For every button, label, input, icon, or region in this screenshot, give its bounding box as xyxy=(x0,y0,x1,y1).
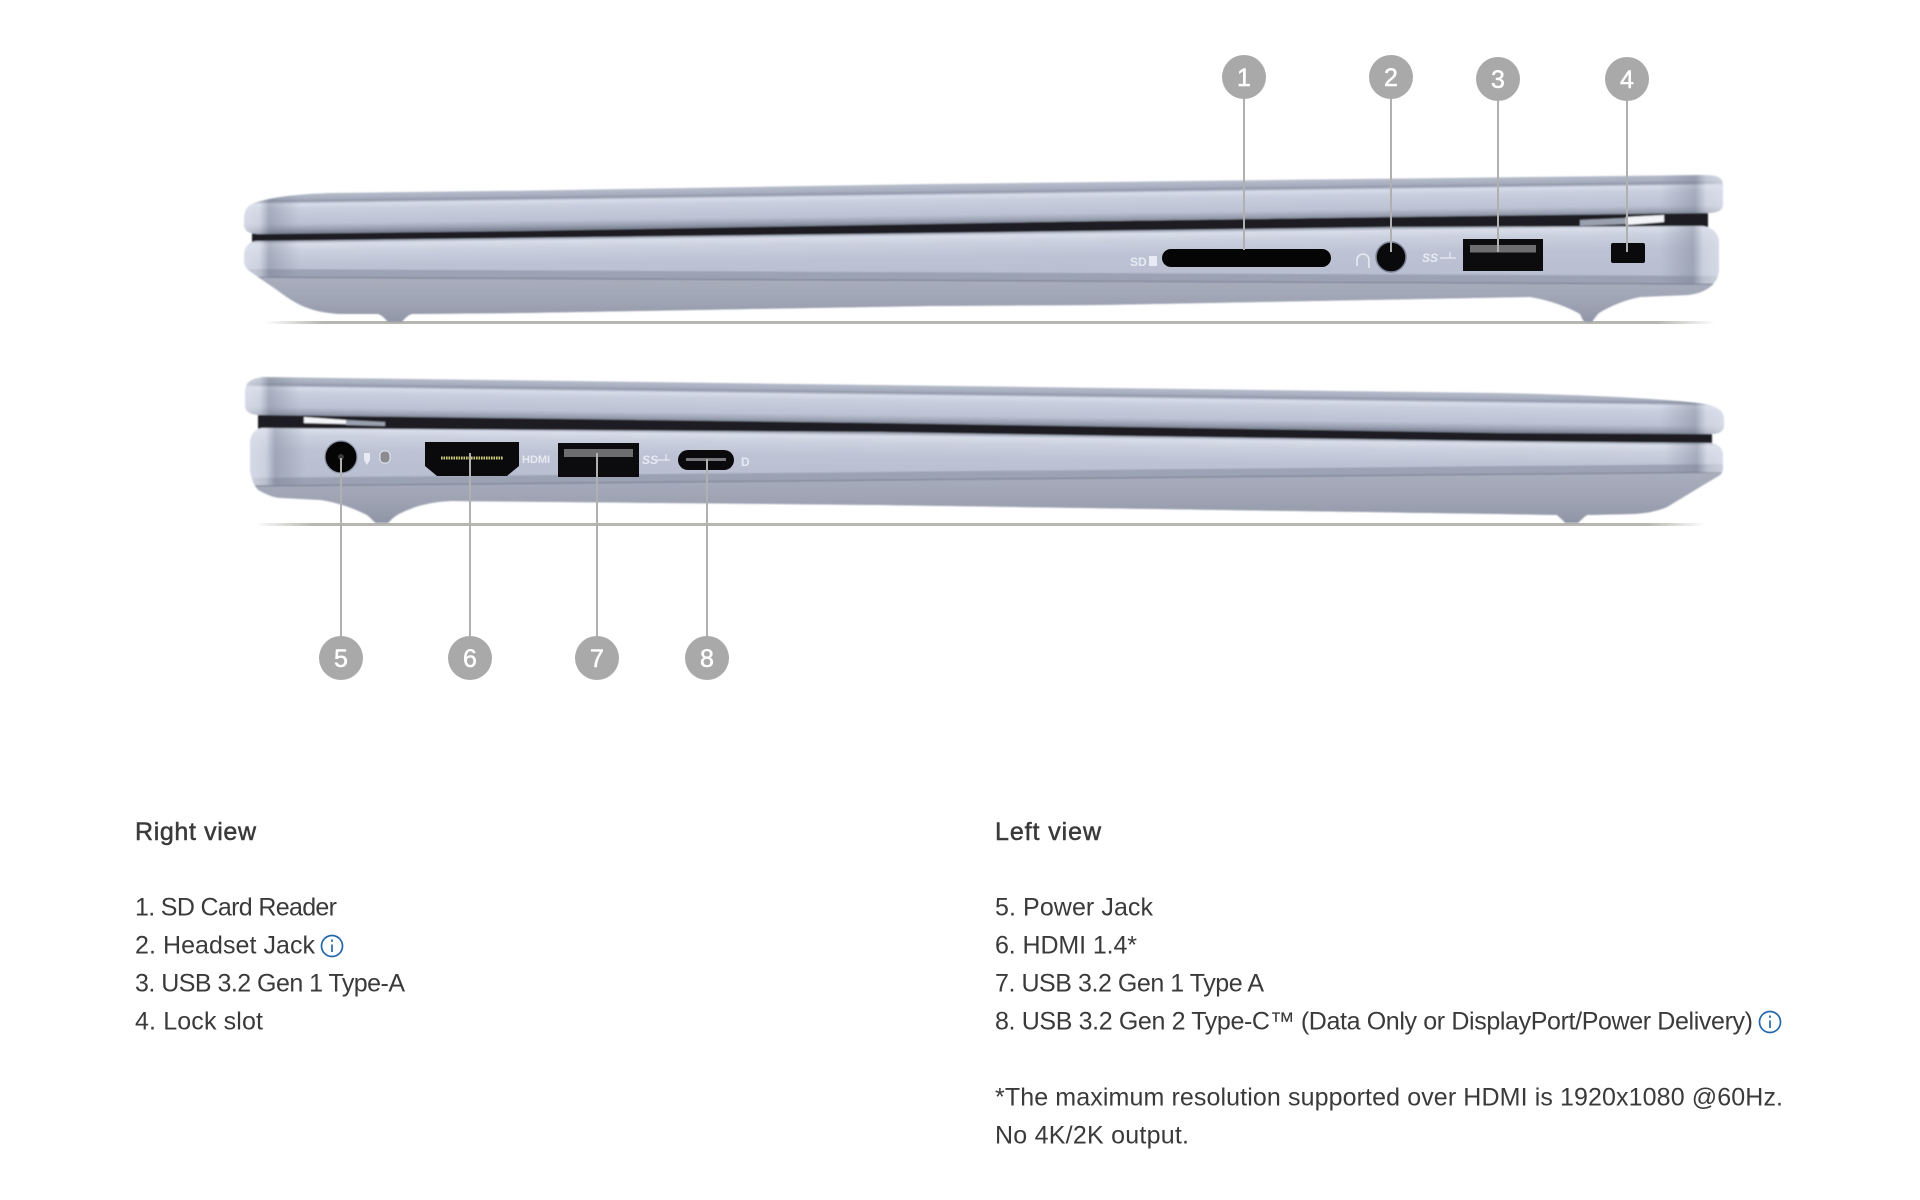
port: SD card reader xyxy=(1130,249,1331,269)
callout 5: 5 xyxy=(334,645,348,673)
callout 8: 8 xyxy=(700,645,714,673)
footnote line 1: *The maximum resolution supported over HDMI is 1920x1080 @60Hz. xyxy=(995,1084,1783,1112)
port: USB-A left xyxy=(558,443,670,477)
list item 1: 1. SD Card Reader xyxy=(135,894,337,922)
callout 7: 7 xyxy=(590,645,604,673)
callout 3: 3 xyxy=(1491,66,1505,94)
callout 6: 6 xyxy=(463,645,477,673)
list item 5: 5. Power Jack xyxy=(995,894,1154,922)
list item 4: 4. Lock slot xyxy=(135,1008,263,1036)
callouts: right view numbers xyxy=(1222,55,1649,252)
callout 2 xyxy=(1369,55,1413,252)
list item 6: 6. HDMI 1.4* xyxy=(995,932,1137,960)
list item 3: 3. USB 3.2 Gen 1 Type-A xyxy=(135,970,405,998)
port: USB-A right xyxy=(1422,239,1543,271)
port: USB-A left: SS xyxy=(642,453,658,467)
heading: right view: Right view xyxy=(135,818,257,846)
callout 4 xyxy=(1605,57,1649,252)
laptop body: left view xyxy=(240,370,1730,530)
list item 2: 2. Headset Jack xyxy=(135,932,316,960)
port: USB-C xyxy=(678,450,750,470)
port: USB-A right: SS xyxy=(1422,251,1438,265)
heading: left view: Left view xyxy=(995,818,1102,846)
port: HDMI xyxy=(425,442,550,476)
port: headset jack xyxy=(1357,242,1406,272)
callout 1: 1 xyxy=(1237,64,1251,92)
text block: left view list xyxy=(995,818,1783,1150)
port: lock slot xyxy=(1611,243,1645,263)
port: power jack xyxy=(325,441,390,473)
icon: info headset xyxy=(322,936,342,956)
callout 3 xyxy=(1476,57,1520,252)
right view laptop xyxy=(240,165,1730,330)
footnote line 2: No 4K/2K output. xyxy=(995,1122,1189,1150)
list item 7: 7. USB 3.2 Gen 1 Type A xyxy=(995,970,1264,998)
floor line: right view xyxy=(265,321,1715,324)
callout 1 xyxy=(1222,55,1266,250)
text block: right view list xyxy=(135,818,405,1036)
port: SD card reader: SD xyxy=(1130,255,1147,269)
callout 5 xyxy=(319,458,363,680)
callout 2: 2 xyxy=(1384,64,1398,92)
port: HDMI: HDMI xyxy=(522,454,550,466)
callouts: left view numbers xyxy=(319,453,729,680)
port: USB-C: D xyxy=(741,455,750,469)
callout 8 xyxy=(685,459,729,680)
left view laptop xyxy=(240,370,1730,530)
floor line: left view xyxy=(255,523,1705,526)
list item 8: 8. USB 3.2 Gen 2 Type-C™ (Data Only or DisplayPort/Power Delivery) xyxy=(995,1008,1753,1036)
callout 7 xyxy=(575,453,619,680)
callout 4: 4 xyxy=(1620,66,1634,94)
callout 6 xyxy=(448,453,492,680)
icon: info type-c xyxy=(1760,1012,1780,1032)
laptop body: right view xyxy=(244,174,1724,322)
